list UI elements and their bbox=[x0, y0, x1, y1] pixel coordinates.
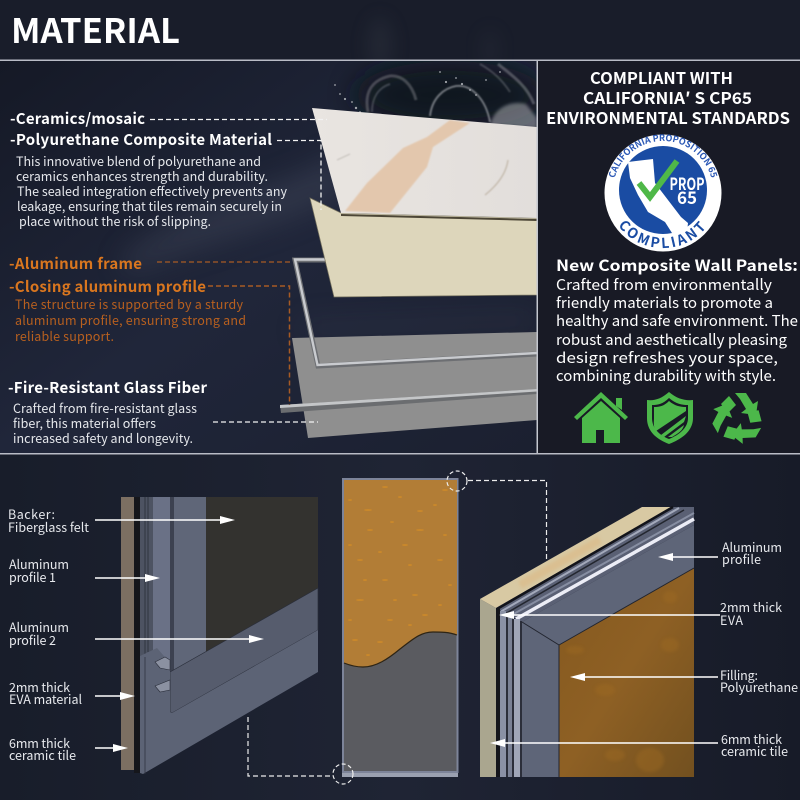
dashed connector: bottom bbox=[248, 717, 332, 776]
label: aluminum profile 1: Aluminum bbox=[9, 554, 69, 573]
label: ceramic tile right bbox=[721, 729, 788, 760]
text block: aluminum description: The structure is supported by a sturdy bbox=[15, 294, 243, 313]
dashed circle: top callout bbox=[447, 471, 467, 491]
label: aluminum profile 1 bbox=[9, 554, 69, 586]
label: ceramic tile right: ceramic tile bbox=[721, 741, 788, 760]
text block: aluminum description: aluminum profile, ensuring strong and bbox=[15, 310, 246, 329]
text block: new composite wall panels: healthy and safe environment. The bbox=[556, 310, 798, 331]
label: filling bbox=[720, 665, 798, 696]
text block: new composite wall panels: robust and aesthetically pleasing bbox=[556, 329, 788, 350]
label: EVA right: 2mm thick bbox=[720, 597, 782, 616]
title: MATERIAL bbox=[11, 4, 180, 53]
icon: Prop 65 badge: PROP bbox=[670, 170, 704, 195]
label: EVA right: EVA bbox=[720, 610, 743, 629]
icon: Prop 65 badge bbox=[604, 134, 722, 252]
label: aluminum profile 2: profile 2 bbox=[9, 630, 56, 649]
text block: aluminum description bbox=[15, 294, 246, 345]
text block: new composite wall panels: Crafted from environmentally bbox=[556, 274, 772, 295]
label: backer bbox=[8, 504, 89, 536]
text block: aluminum description: reliable support. bbox=[15, 326, 114, 345]
text block: new composite wall panels: design refreshes your space, bbox=[556, 347, 778, 368]
label: EVA right bbox=[720, 597, 782, 629]
label: backer: Backer: bbox=[8, 504, 55, 523]
foam texture bbox=[348, 486, 452, 656]
text block: glass fiber description: fiber, this material offers bbox=[13, 413, 156, 432]
label: aluminum profile right: profile bbox=[722, 549, 761, 568]
text block: polyurethane description bbox=[16, 151, 287, 230]
diagram: assembled panel corner bbox=[480, 507, 694, 777]
arrow: right ceramic bbox=[490, 739, 718, 747]
label: closing aluminum profile: -Closing aluminum profile bbox=[9, 276, 206, 297]
heading: compliance: COMPLIANT WITH bbox=[590, 65, 733, 89]
icon: Prop 65 badge: 65 bbox=[677, 184, 697, 209]
panel background bbox=[0, 61, 537, 453]
label: aluminum frame: -Aluminum frame bbox=[9, 253, 142, 274]
text block: polyurethane description: This innovative blend of polyurethane and bbox=[16, 151, 261, 170]
leader lines bbox=[150, 120, 327, 422]
layer: ceramic tile bbox=[312, 108, 537, 221]
text block: new composite wall panels: friendly materials to promote a bbox=[556, 292, 773, 313]
layer: polyurethane composite bbox=[310, 198, 537, 297]
water splash bbox=[334, 61, 545, 129]
arrow: backer bbox=[95, 516, 235, 524]
label: ceramics: -Ceramics/mosaic bbox=[10, 108, 145, 129]
label: filling: Polyurethane bbox=[720, 677, 798, 696]
text block: new composite wall panels: combining durability with style. bbox=[556, 365, 776, 386]
text block: polyurethane description: The sealed integration effectively prevents any bbox=[17, 181, 287, 200]
heading: compliance bbox=[546, 65, 790, 129]
vertical divider bbox=[536, 60, 538, 453]
label: aluminum profile 2 bbox=[9, 617, 69, 649]
text block: glass fiber description: increased safety and longevity. bbox=[13, 428, 193, 447]
arrow: ceramic bbox=[95, 744, 128, 752]
heading: compliance: CALIFORNIA′ S CP65 bbox=[583, 85, 752, 109]
horizontal dividers bbox=[0, 60, 800, 454]
text block: glass fiber description: Crafted from fire-resistant glass bbox=[13, 398, 197, 417]
text block: new composite wall panels bbox=[556, 254, 798, 386]
layer: closing aluminum profile bbox=[280, 389, 537, 413]
label: aluminum profile right: Aluminum bbox=[722, 537, 782, 556]
label: EVA material: EVA material bbox=[9, 689, 82, 708]
arrow: aluminum profile 1 bbox=[95, 574, 160, 582]
layer: aluminum frame bbox=[295, 260, 537, 366]
label: ceramic tile left bbox=[9, 733, 76, 764]
label: polyurethane composite: -Polyurethane Composite Material bbox=[10, 129, 272, 150]
label: ceramic tile left: ceramic tile bbox=[9, 745, 76, 764]
label: aluminum profile 1: profile 1 bbox=[9, 567, 56, 586]
dashed circle: bottom callout bbox=[333, 764, 353, 784]
label: ceramic tile right: 6mm thick bbox=[721, 729, 782, 748]
text block: polyurethane description: place without the risk of slipping. bbox=[19, 211, 211, 230]
label: glass fiber: -Fire-Resistant Glass Fiber bbox=[8, 377, 207, 398]
panel: construction details bbox=[0, 455, 800, 800]
arrow: right aluminum profile bbox=[658, 553, 718, 561]
panel: material layers bbox=[0, 61, 545, 453]
text block: new composite wall panels: New Composite Wall Panels: bbox=[556, 254, 798, 276]
icon: Prop 65 badge: COMPLIANT bbox=[620, 220, 704, 248]
diagram: cross-section bbox=[342, 479, 458, 777]
label: EVA material bbox=[9, 677, 82, 708]
label: aluminum profile 2: Aluminum bbox=[9, 617, 69, 636]
label: ceramic tile left: 6mm thick bbox=[9, 733, 70, 752]
label: backer: Fiberglass felt bbox=[8, 517, 89, 536]
icon: recycling bbox=[706, 393, 768, 448]
arrow: aluminum profile 2 bbox=[95, 635, 264, 643]
arrow: right filling bbox=[570, 673, 718, 681]
label: aluminum profile right bbox=[722, 537, 782, 568]
label: EVA material: 2mm thick bbox=[9, 677, 70, 696]
diagram: corner profile bbox=[121, 497, 318, 774]
label: filling: Filling: bbox=[720, 665, 758, 684]
arrow: right EVA bbox=[499, 611, 720, 619]
icon: house bbox=[574, 392, 628, 443]
arrow: EVA bbox=[95, 692, 135, 700]
icon: Prop 65 badge: CALIFORNIA PROPOSITION 65 bbox=[609, 134, 718, 178]
text block: glass fiber description bbox=[13, 398, 197, 447]
heading: compliance: ENVIRONMENTAL STANDARDS bbox=[546, 105, 790, 129]
panel: compliance bbox=[546, 65, 798, 444]
layer: fire-resistant glass fiber bbox=[292, 332, 537, 438]
dashed connector: top bbox=[468, 480, 546, 560]
icon: shield bbox=[647, 392, 693, 444]
text block: polyurethane description: leakage, ensuring that tiles remain securely in bbox=[17, 196, 282, 215]
header band bbox=[0, 0, 800, 73]
text block: polyurethane description: ceramics enhances strength and durability. bbox=[16, 166, 268, 185]
